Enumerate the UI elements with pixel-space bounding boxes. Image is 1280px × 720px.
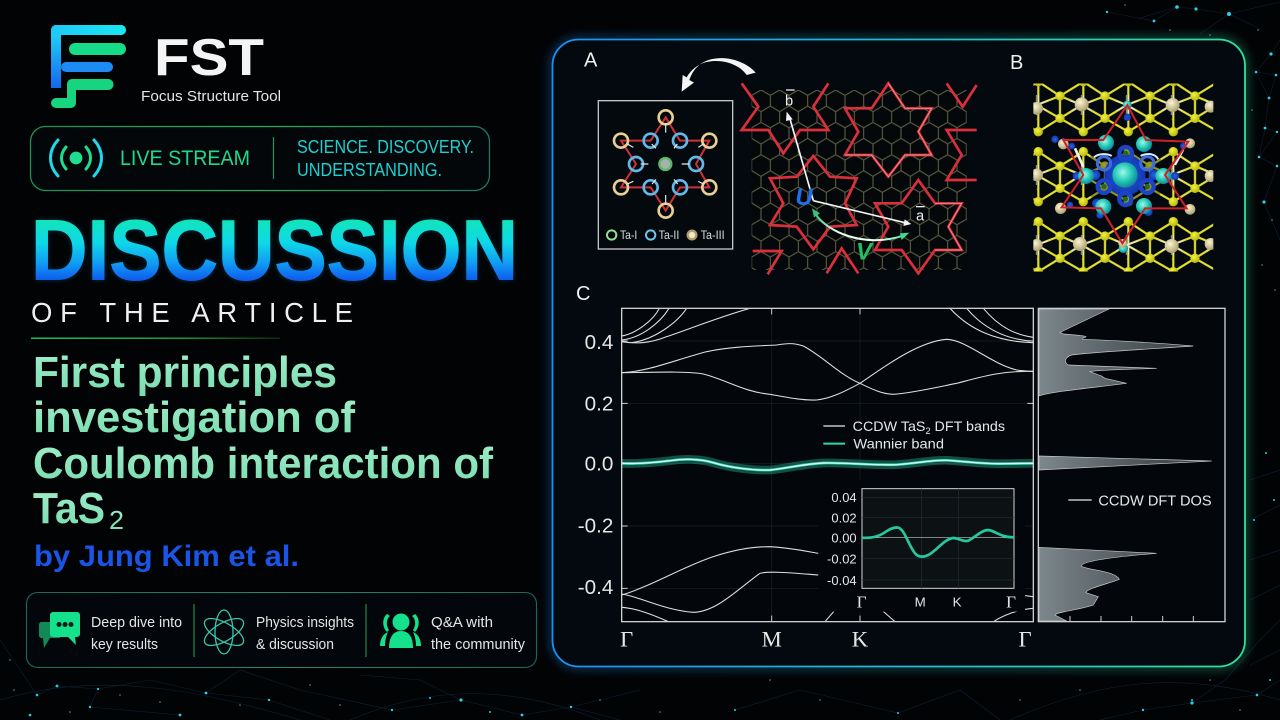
x axis labels <box>620 627 1032 652</box>
inset x axis labels: K <box>953 595 962 610</box>
orbital density cluster <box>1051 101 1195 253</box>
icon: broadcast signal <box>50 140 102 176</box>
y axis labels: -0.2 <box>578 514 613 537</box>
Wannier band <box>622 459 1033 470</box>
author line: by Jung Kim et al. <box>34 540 299 573</box>
slogan: science discovery understanding: SCIENCE. DISCOVERY. <box>297 137 474 157</box>
legend: Ta atom types <box>607 229 725 242</box>
legend: DOS: CCDW DFT DOS <box>1098 493 1212 509</box>
inset x axis labels: Γ <box>1006 592 1016 611</box>
legend: bands: Wannier band <box>853 436 944 452</box>
legend: bands: DFT bands <box>931 418 1005 434</box>
x axis labels: Γ <box>620 627 633 652</box>
legend: bands: 2 <box>925 426 931 436</box>
label B: B <box>1010 52 1023 74</box>
legend: bands <box>823 418 1005 452</box>
DOS peaks <box>1039 309 1212 621</box>
legend: Ta atom types: Ta-I <box>620 229 637 242</box>
slogan: science discovery understanding: UNDERSTANDING. <box>297 160 442 180</box>
y axis labels <box>578 331 613 599</box>
text: physics insights: Physics insights <box>256 614 354 631</box>
inset y axis labels: -0.04 <box>827 573 857 588</box>
red star outline <box>1062 105 1188 243</box>
icon: atom <box>200 610 248 654</box>
logo: FST mark and wordmark <box>51 25 281 108</box>
wordmark: FST: FST <box>154 29 264 87</box>
grid lines <box>622 308 1033 622</box>
curved arrow V <box>812 208 909 240</box>
slogan: science discovery understanding <box>297 137 474 180</box>
vector label b: b <box>785 94 793 110</box>
vector label a: a <box>916 209 925 225</box>
x axis labels: Γ <box>1018 627 1032 652</box>
text: Q and A: the community <box>431 636 525 653</box>
live stream banner <box>30 126 490 190</box>
y axis labels: 0.2 <box>585 393 613 416</box>
heading: DISCUSSION: DISCUSSION <box>31 204 518 298</box>
icon: community group <box>380 614 421 648</box>
icon: F logo mark <box>51 25 126 108</box>
inset y axis labels: 0.04 <box>831 490 857 505</box>
y axis labels: 0.0 <box>585 452 613 475</box>
figure panel <box>552 40 1245 666</box>
y axis labels: 0.4 <box>585 331 613 354</box>
inset x axis labels: M <box>915 595 926 610</box>
vector arrows: a and b <box>789 117 905 223</box>
inset y axis labels: -0.02 <box>827 551 857 566</box>
text: Q and A <box>431 614 525 653</box>
label V: V <box>856 238 874 265</box>
panel A: lattice figure <box>584 50 977 274</box>
tagline: Focus Structure Tool: Focus Structure Tool <box>141 88 281 105</box>
heading: DISCUSSION: DISCUSSION <box>31 204 518 298</box>
text: physics insights: & discussion <box>256 636 334 653</box>
label A: A <box>584 50 598 72</box>
x axis labels: K <box>852 627 869 652</box>
y axis labels: -0.4 <box>578 576 613 599</box>
icon: chat bubbles <box>39 612 80 648</box>
inset y axis labels: 0.00 <box>831 531 857 546</box>
panel B: charge density crystal structure <box>1010 52 1217 272</box>
inset y axis labels <box>827 490 857 588</box>
panel C: density of states chart <box>1038 308 1225 622</box>
legend: bands: CCDW TaS <box>853 418 924 434</box>
label U: U <box>795 184 813 211</box>
legend: Ta atom types: Ta-II <box>659 229 679 242</box>
panel C: band structure chart <box>578 308 1033 652</box>
subheading: of the article: OF THE ARTICLE <box>31 297 353 328</box>
DFT bands <box>622 308 1033 622</box>
inset: Ta atom star <box>598 101 733 249</box>
inset chart: Wannier zoom <box>818 480 1025 612</box>
article title: First principles <box>33 348 337 397</box>
article title <box>33 348 493 535</box>
label: live stream: LIVE STREAM <box>120 147 250 170</box>
lattice: honeycomb with red stars <box>742 83 977 274</box>
text: deep dive: key results <box>91 636 158 653</box>
inset x axis labels: Γ <box>857 592 867 611</box>
feature strip <box>26 592 536 668</box>
x axis labels: M <box>762 627 782 652</box>
article title: TaS <box>33 484 105 533</box>
article title: 2 <box>109 505 124 535</box>
article title: investigation of <box>33 393 355 442</box>
text: Q and A: Q&A with <box>431 614 493 631</box>
vector label b <box>785 89 795 110</box>
arrow: curved white arrow <box>682 58 756 92</box>
label C: C <box>576 283 590 305</box>
text: deep dive <box>91 614 182 653</box>
legend: Ta atom types: Ta-III <box>701 229 725 242</box>
text: physics insights <box>256 614 354 653</box>
article title: Coulomb interaction of <box>33 439 493 488</box>
text: deep dive: Deep dive into <box>91 614 182 631</box>
inset x axis labels <box>857 592 1016 611</box>
inset y axis labels: 0.02 <box>831 511 857 526</box>
